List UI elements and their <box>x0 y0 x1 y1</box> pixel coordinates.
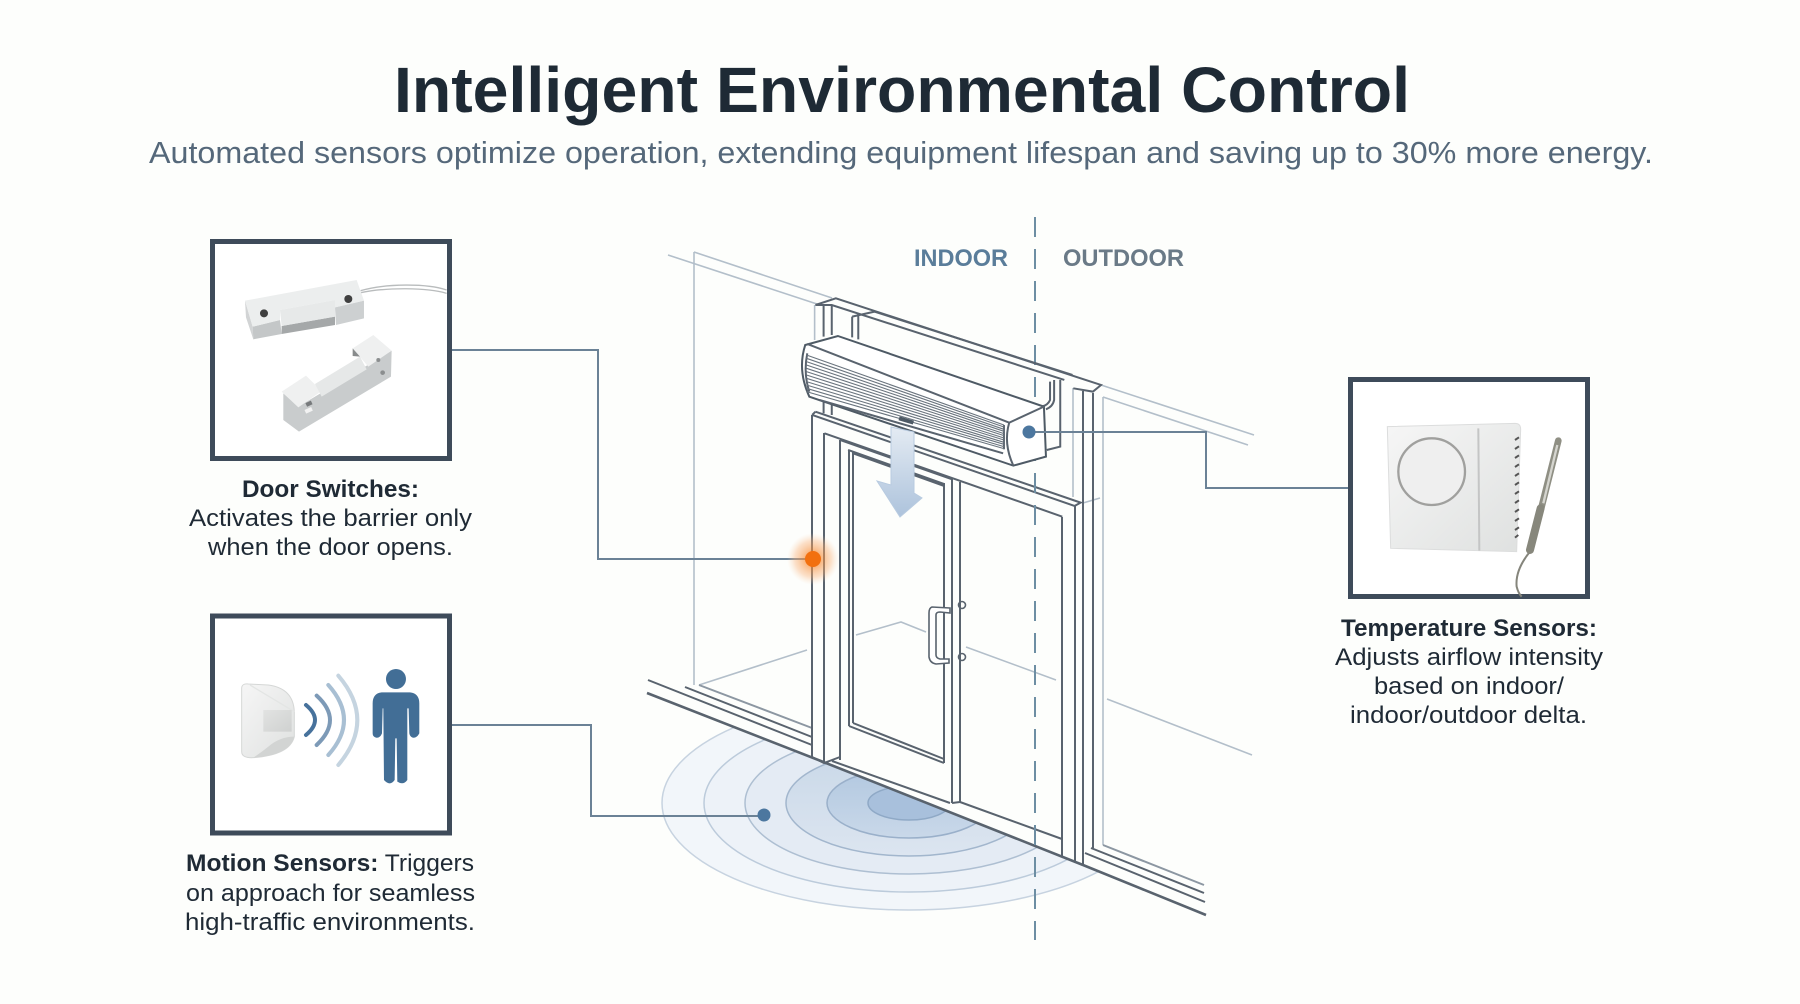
door switches caption <box>189 476 473 561</box>
motion sensors caption: Motion Sensors: Triggers <box>186 850 474 877</box>
title: Intelligent Environmental Control <box>394 54 1410 126</box>
temperature sensors caption: Adjusts airflow intensity <box>1335 644 1604 671</box>
temperature sensor frame <box>1350 380 1588 596</box>
motion sensors caption: on approach for seamless <box>186 880 475 907</box>
door switches caption: Door Switches: <box>242 476 419 503</box>
indoor outdoor dashed divider <box>1034 217 1036 940</box>
panel: door switches <box>212 242 450 458</box>
indoor label: INDOOR <box>914 245 1008 272</box>
unit body <box>802 336 1046 466</box>
icon: thermostat and probe <box>1387 423 1558 597</box>
unit sensor dot <box>1022 426 1036 438</box>
door and air curtain diagram <box>647 217 1254 940</box>
door handle <box>929 602 966 664</box>
temperature sensors caption: indoor/outdoor delta. <box>1350 702 1587 729</box>
temperature sensors caption: Temperature Sensors: <box>1341 615 1597 642</box>
unit edges <box>806 344 1044 466</box>
door frame and leaves <box>812 391 1093 865</box>
motion zone dot <box>758 808 770 822</box>
subtitle: Automated sensors optimize operation, extending equipment lifespan and saving up to 30% more energy. <box>149 135 1653 170</box>
temperature sensors caption <box>1335 615 1604 729</box>
motion sensors caption: high-traffic environments. <box>185 909 475 936</box>
floor threshold lines <box>647 680 1206 915</box>
unit grille <box>806 355 1004 449</box>
airflow arrow <box>877 427 922 517</box>
wall outline lines <box>668 252 1254 845</box>
connector: door switches <box>452 350 813 559</box>
mounting bracket <box>815 298 1101 450</box>
icon: motion detector and person <box>242 669 419 783</box>
motion sensors caption <box>185 850 475 936</box>
door sensor indicator <box>787 533 839 585</box>
motion detection zone on floor <box>661 728 1098 911</box>
outdoor label: OUTDOOR <box>1063 245 1184 272</box>
door switches caption: when the door opens. <box>207 534 453 561</box>
unit badge <box>899 418 913 423</box>
connector: temperature sensors <box>1029 432 1348 488</box>
door switch frame <box>212 242 450 458</box>
motion sensor frame <box>212 616 450 833</box>
air curtain unit <box>802 298 1101 466</box>
panel: temperature sensors <box>1350 380 1588 597</box>
door switches caption: Activates the barrier only <box>189 505 473 532</box>
temperature sensors caption: based on indoor/ <box>1374 673 1564 700</box>
connector: motion sensors <box>452 725 764 816</box>
panel: motion sensors <box>212 616 450 833</box>
icon: door switch pair <box>245 280 447 432</box>
